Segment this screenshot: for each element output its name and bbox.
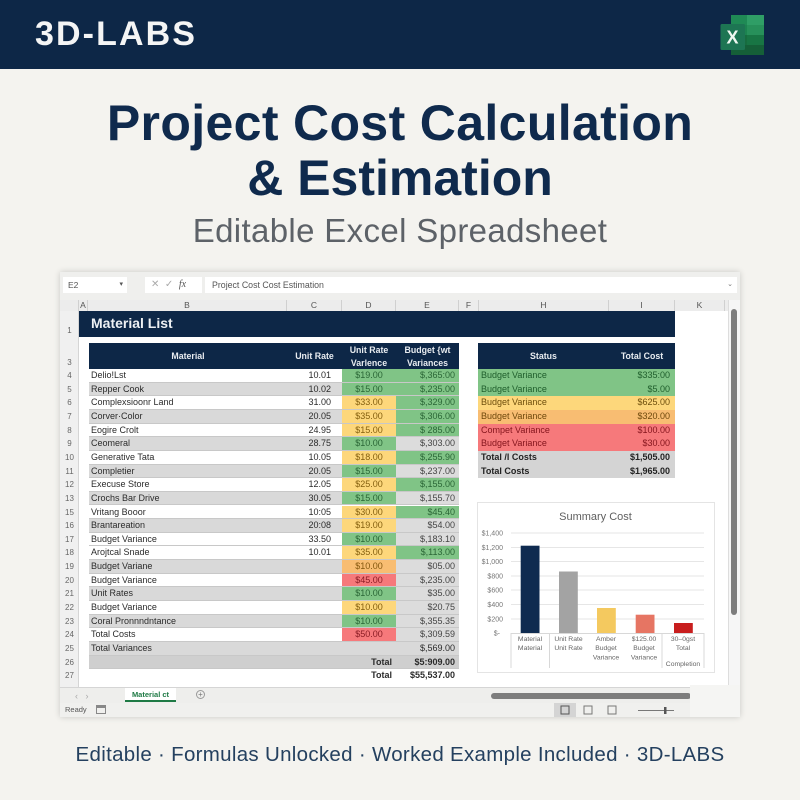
category axis labels: $125.00 [632,636,656,643]
category axis labels: Budget [595,645,617,652]
row number gutter: 15 [65,508,74,516]
material table rows: $,155.00 [420,479,455,489]
material table rows: $15.00 [355,493,383,503]
ready label: Ready [65,705,87,714]
formula input: Project Cost Cost Estimation [212,280,324,290]
material table rows: 10.02 [308,384,331,394]
active tab [125,688,176,702]
formula bar [60,272,740,300]
formula input [205,277,737,293]
formula buttons: ✕ ✓ fx [151,279,186,290]
row number gutter: 11 [65,467,74,476]
subtitle: Editable Excel Spreadsheet [193,212,607,249]
material table rows: $,237.00 [420,466,455,476]
material table rows: $50.00 [355,629,383,639]
row number gutter: 10 [65,453,74,462]
add sheet button [196,690,205,699]
vertical scrollbar [728,300,740,687]
material table rows: $,155.70 [420,493,455,503]
material table rows: $10.00 [355,438,383,448]
active tab: Material ct [132,690,169,699]
view controls [554,703,674,717]
category axis labels: Completion [666,661,700,668]
material table rows: 12.05 [308,479,331,489]
row number gutter: 24 [65,630,74,639]
add sheet button: + [198,690,203,699]
panel: spreadsheet window [60,272,740,717]
material table rows: $15.00 [355,466,383,476]
column headers: K [697,300,702,310]
material table rows: Vritang Booor [91,506,146,516]
cell name box [63,277,127,293]
material table rows: Generative Tata [91,452,154,462]
material table rows: $19.00 [355,520,383,530]
material table rows: Delio!Lst [91,370,126,380]
category axis labels: Material [518,645,543,652]
category axis labels: Variance [631,654,657,662]
icon: Excel logo: X [726,28,739,48]
material table rows: $15.00 [355,425,383,435]
material table rows: $,303.00 [420,438,455,448]
status table: $320.00 [637,411,670,421]
material table rows: $,569.00 [420,643,455,653]
material table rows: Total Costs [91,629,136,639]
status table: $5.00 [647,384,670,394]
material table rows: $33.00 [355,397,383,407]
material table rows: $10.00 [355,534,383,544]
material table rows: $,255.90 [420,452,455,462]
material table rows: Total [371,657,392,667]
column headers: B [184,300,190,310]
material table rows: $05.00 [427,561,455,571]
material table rows: 20:08 [308,520,331,530]
status table: Compet Variance [481,425,550,435]
row number gutter: 13 [65,494,74,503]
status table header: Total Cost [621,351,663,361]
category axis labels: Amber [596,636,617,643]
column headers: A [80,300,86,310]
material table rows: $30.00 [355,506,383,516]
y axis and gridlines: $200 [487,616,503,624]
row number gutter: 8 [67,426,72,435]
bottom-right corner cover [690,685,740,717]
material table rows: Complexsioonr Land [91,397,174,407]
sheet navigation arrows: ‹ › [75,691,88,701]
row number gutter: 25 [65,644,74,653]
material table rows: $,113.00 [421,547,455,557]
material table rows: Eogire Crolt [91,425,139,435]
material table header: Unit Rate [295,351,334,361]
sheet title band: Material List [91,315,173,331]
material table rows: Completier [91,466,135,476]
material table rows: $35.00 [355,411,383,421]
y axis and gridlines [482,530,704,638]
column headers [60,300,740,311]
material table rows: $,365:00 [420,370,455,380]
material table rows: Unit Rates [91,588,133,598]
row number gutter: 6 [67,398,72,407]
status table: $1,505.00 [630,452,670,462]
material table rows: 30.05 [308,493,331,503]
material table rows: Ceomeral [91,438,130,448]
status table [478,343,675,478]
material table rows: Arojtcal Snade [91,547,150,557]
material table rows [89,369,459,680]
material table rows: Budget Variane [91,561,152,571]
material table rows: 28.75 [308,438,331,448]
material table rows: Execuse Store [91,479,150,489]
column headers: D [365,300,372,310]
material table header: Unit Rate [350,345,388,355]
material table rows: $25.00 [355,479,383,489]
status table: $100.00 [637,425,670,435]
column headers: C [311,300,317,310]
column headers: E [424,300,430,310]
status table header [478,343,675,369]
y axis and gridlines: $- [494,630,501,638]
status table: Total /l Costs [481,452,537,462]
material table rows: $10.00 [355,602,383,612]
category axis labels: 30–0gst [671,636,695,643]
status table: Budget Variance [481,438,547,448]
material table header [89,343,459,369]
category axis labels: Budget [633,645,655,652]
material table rows: $45.40 [427,506,455,516]
cell name box: E2 [68,280,78,290]
material table rows: $10.00 [355,561,383,571]
title: & Estimation [247,150,553,206]
material table rows: Crochs Bar Drive [91,493,160,503]
title [107,95,693,206]
material table rows: Total Variances [91,643,152,653]
y axis and gridlines: $600 [487,588,503,594]
y axis and gridlines: $400 [487,602,503,609]
material table header: Budget {wt [405,345,450,355]
material table rows: 20.05 [308,466,331,476]
bars [521,546,693,633]
material table rows: $,329.00 [420,397,455,407]
y axis and gridlines: $1,000 [482,559,503,566]
row number gutter: 17 [65,535,74,544]
material table rows: $,235.00 [420,575,455,585]
material table rows: 10.01 [308,370,331,380]
row number gutter: 3 [67,358,72,367]
material table rows: 33.50 [308,534,331,544]
row number gutter: 7 [67,412,72,421]
material table rows: $20.75 [427,602,455,612]
row number gutter: 23 [65,617,74,626]
y axis and gridlines: $1,400 [482,530,503,538]
material table rows: Corver·Color [91,411,143,421]
chart title: Summary Cost [559,511,632,523]
row number gutter: 1 [67,326,72,335]
row number gutter: 19 [65,562,74,571]
status table header: Status [530,351,557,361]
material table rows: $15.00 [355,384,383,394]
y axis and gridlines: $800 [487,574,503,580]
material table rows: Budget Variance [91,602,157,612]
material table header: Material [171,351,205,361]
row number gutter [60,311,79,687]
material table rows: Repper Cook [91,384,144,394]
category axis labels: Material [518,636,543,643]
status table: Budget Variance [481,370,547,380]
category axis labels: Total [676,645,691,652]
status table: Budget Variance [481,397,547,407]
horizontal scrollbar [491,693,691,699]
row number gutter: 26 [65,658,74,667]
material table rows: Brantareation [91,520,145,530]
material table rows: Budget Variance [91,575,157,585]
material table rows: $ 285.00 [420,425,455,435]
material table rows: Budget Variance [91,534,157,544]
category axis labels: Variance [593,654,619,662]
title: Project Cost Calculation [107,95,693,151]
material table rows: $55,537.00 [410,670,455,680]
chart: summary cost [477,502,715,673]
sheet tabs bar [60,687,740,705]
status table: $1,965.00 [630,466,670,476]
formula input: ⌄ [727,281,733,288]
status bar [60,703,740,717]
row number gutter: 12 [65,480,74,489]
row number gutter: 27 [65,671,74,680]
y axis and gridlines: $1,200 [482,545,503,552]
category axis labels: Unit Rate [554,645,583,652]
material table rows: $10.00 [355,588,383,598]
icon: macro record [96,705,106,714]
sheet title band [79,311,675,336]
material table rows: Total [371,670,392,680]
material table rows: $35.00 [355,547,383,557]
status table: Budget Variance [481,384,547,394]
status table: $30.00 [642,438,670,448]
material table rows: $5:909.00 [414,657,455,667]
status table: Budget Variance [481,411,547,421]
row number gutter: 18 [65,548,74,557]
material table rows: Coral Pronnndntance [91,616,176,626]
material table rows: 20.05 [308,411,331,421]
footer tagline: Editable · Formulas Unlocked · Worked Example Included · 3D-LABS [76,743,724,766]
material table rows: $,183.10 [420,534,455,544]
material table rows: $54.00 [427,520,455,530]
column headers: I [640,300,643,310]
category axis labels: Unit Rate [554,636,583,643]
material table rows: $10.00 [355,616,383,626]
material table rows: $,235.00 [420,384,455,394]
row number gutter: 22 [65,603,74,612]
material table rows: 31.00 [308,397,331,407]
status table: $625.00 [637,397,670,407]
column headers: H [540,300,547,310]
status table: $335:00 [637,370,670,380]
material table rows: $,306.00 [420,411,455,421]
category axis labels [511,633,704,668]
material table rows: $18.00 [355,452,383,462]
material table rows: $,309.59 [420,629,455,639]
cell name box: ▾ [119,281,123,288]
status table: Total Costs [481,466,529,476]
row number gutter: 16 [65,521,74,530]
material table rows: $45.00 [355,575,383,585]
material table rows: 10.01 [308,547,331,557]
header bar [0,0,800,69]
material table rows: $,355.35 [420,616,455,626]
material table rows: 24.95 [308,425,331,435]
material table rows: 10:05 [308,506,331,516]
row number gutter: 21 [65,589,74,598]
formula buttons [145,277,202,293]
brand logo text: 3D-LABS [35,15,197,53]
row number gutter: 9 [67,439,72,448]
icon: Excel logo [720,15,764,55]
column headers: F [466,300,471,310]
row number gutter: 20 [65,576,74,585]
sheet area [79,311,728,687]
row number gutter: 5 [67,385,72,394]
material table header: Varlence [351,358,387,368]
material table header: Variances [407,358,448,368]
material table rows: $35.00 [427,588,455,598]
material table rows: $19.00 [355,370,383,380]
material table rows: 10.05 [308,452,331,462]
row number gutter: 4 [67,371,72,380]
